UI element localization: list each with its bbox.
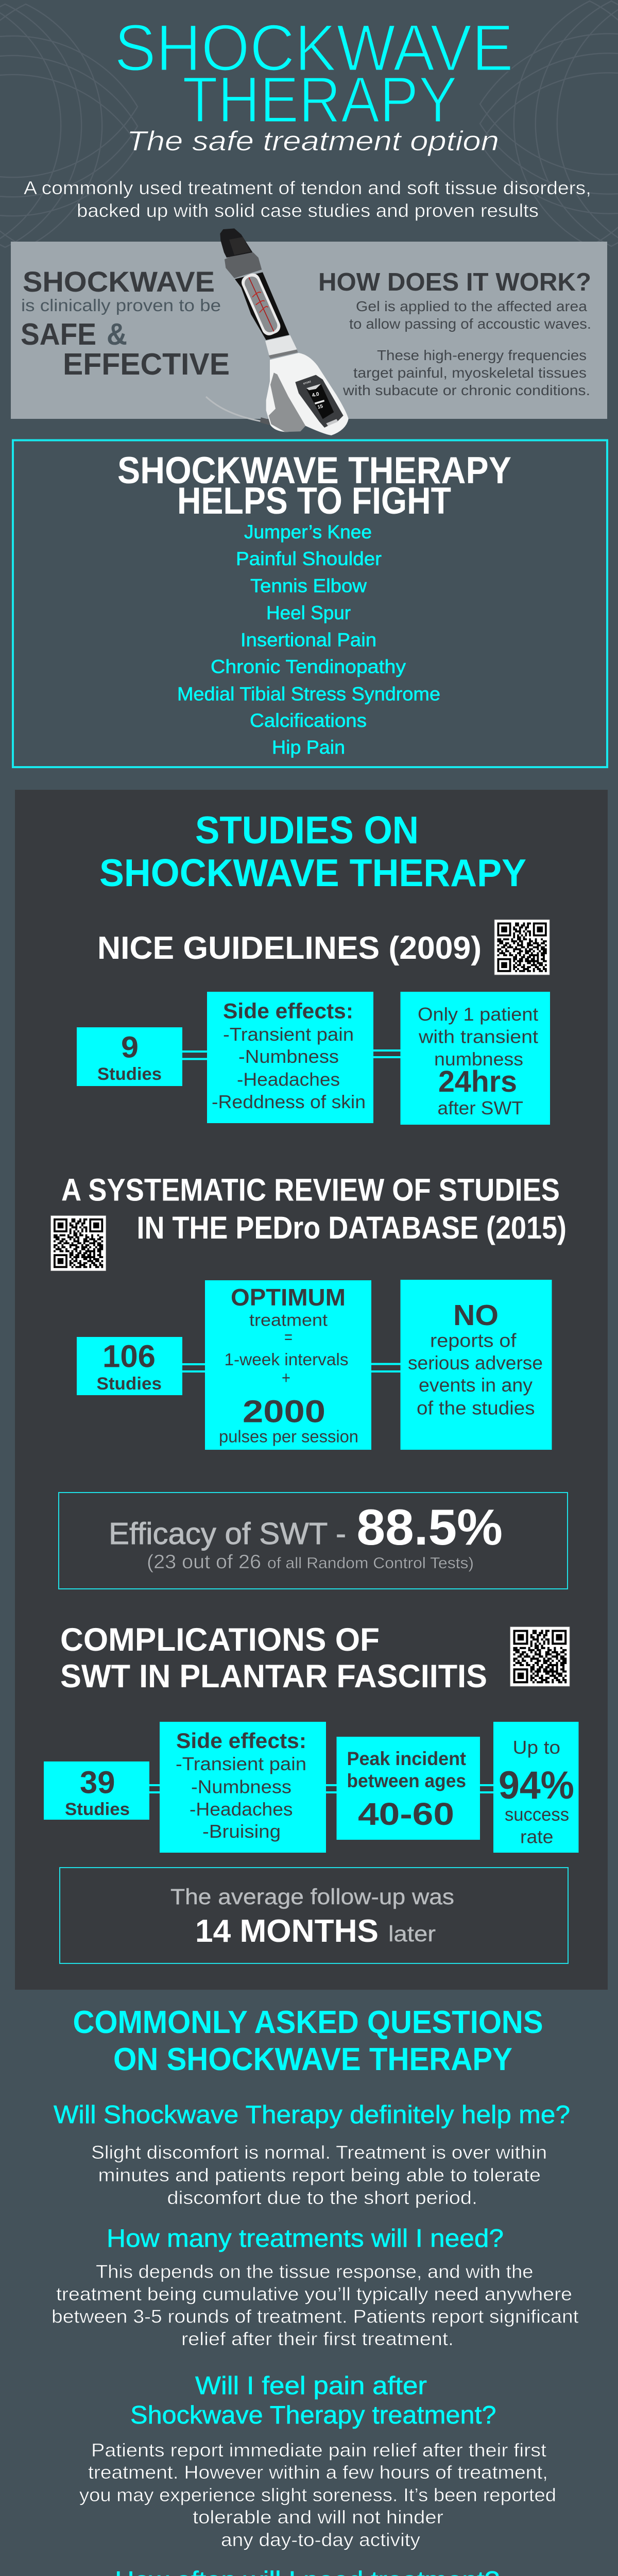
box: side effects: -Headaches [237,1069,340,1090]
question 3 [130,2372,496,2429]
box: one patient: Only 1 patient [418,1004,538,1025]
box: one patient: numbness [434,1048,523,1070]
answer 3: you may experience slight soreness. It’s been reported [79,2484,556,2505]
callout: follow-up: The average follow-up was [170,1885,454,1909]
flow: plantar fasciitis results [44,1722,579,1853]
box: no adverse events: of the studies [417,1397,535,1419]
box: side effects [160,1722,326,1853]
answer 3: tolerable and will not hinder [193,2506,443,2528]
title: SHOCKWAVE [114,11,513,85]
answer 1: discomfort due to the short period. [167,2187,477,2208]
box: one patient [401,992,550,1125]
icon: QR code PEDro [51,1216,106,1271]
answer 2 [52,2261,579,2349]
answer 1: minutes and patients report being able to tolerate [98,2164,541,2185]
title [114,11,513,136]
icon: shockwave device [206,228,349,435]
box: optimum treatment: = [284,1327,293,1347]
box: side effects: Side effects: [223,998,353,1023]
box: success rate: 94% [499,1764,574,1807]
heading: systematic review [61,1173,566,1245]
answer 2: relief after their first treatment. [181,2328,454,2349]
left claim text [21,265,230,381]
answer 3: any day-to-day activity [221,2529,420,2550]
box: peak incident: 40-60 [358,1797,454,1832]
conditions list: Insertional Pain [241,630,376,650]
subtitle: The safe treatment option [127,126,499,157]
FAQ heading: ON SHOCKWAVE THERAPY [113,2042,512,2077]
box: side effects [207,992,373,1123]
left claim text: & [107,317,127,351]
box: 39 studies [44,1761,149,1820]
box: optimum treatment: treatment [249,1311,328,1329]
intro text: A commonly used treatment of tendon and soft tissue disorders, [24,177,591,198]
answer 1 [91,2142,547,2208]
answer 3: Patients report immediate pain relief after their first [91,2439,546,2461]
left claim text: SAFE [21,317,96,351]
box: peak incident: Peak incident [347,1748,466,1769]
left claim text: EFFECTIVE [63,347,230,381]
title: THERAPY [182,63,457,136]
box: peak incident: between ages [347,1770,466,1791]
box: 9 studies: 9 [121,1030,139,1064]
callout: efficacy: 88.5% [356,1499,503,1555]
how does it work text: to allow passing of accoustic waves. [349,316,591,332]
box: side effects: -Headaches [190,1799,293,1820]
box: optimum treatment: 1-week intervals [225,1350,348,1369]
how does it work text: HOW DOES IT WORK? [318,268,591,296]
how does it work text: These high-energy frequencies [377,347,587,363]
studies heading [99,808,526,894]
box: side effects: -Reddness of skin [212,1091,366,1112]
icon: shockwave device: STORZ [303,380,312,385]
conditions list: Tennis Elbow [250,575,367,597]
box: 9 studies [77,1027,182,1086]
box: side effects: -Numbness [191,1776,291,1797]
box: success rate: rate [520,1826,553,1848]
conditions list: Calcifications [250,710,367,731]
box: side effects: -Transient pain [176,1753,306,1774]
conditions list: Hip Pain [272,737,345,758]
section: commonly asked questions [52,2005,579,2576]
FAQ heading: COMMONLY ASKED QUESTIONS [73,2005,543,2040]
answer 2: This depends on the tissue response, and with the [96,2261,534,2282]
conditions list: Chronic Tendinopathy [211,656,406,677]
answer 3 [79,2439,556,2550]
callout: follow-up: 14 MONTHS [195,1913,379,1949]
callout: follow-up: later [388,1922,436,1946]
heading: complications: COMPLICATIONS OF [60,1622,380,1658]
box: 39 studies: Studies [65,1800,130,1819]
box: no adverse events: events in any [419,1375,533,1396]
box: no adverse events: NO [453,1299,499,1332]
box: peak incident [337,1737,480,1840]
heading: systematic review: A SYSTEMATIC REVIEW OF STUDIES [61,1173,560,1208]
left claim text: is clinically proven to be [21,296,221,315]
box: optimum treatment: OPTIMUM [231,1284,346,1311]
box: 9 studies: Studies [97,1064,162,1084]
box: optimum treatment: 2000 [243,1394,325,1429]
conditions list: Jumper’s Knee [244,521,372,543]
box: side effects: -Numbness [238,1046,339,1067]
heading: complications [60,1622,487,1694]
box: 106 studies: 106 [102,1338,156,1374]
heading: HELPS TO FIGHT [177,480,451,522]
how does it work text [318,268,591,398]
left claim text: SHOCKWAVE [23,265,215,298]
answer 2: treatment being cumulative you’ll typically need anywhere [56,2283,572,2304]
box: success rate [493,1722,579,1853]
question 2: How many treatments will I need? [107,2225,504,2252]
heading [117,450,511,522]
heading: systematic review: IN THE PEDro DATABASE (2015) [137,1210,566,1245]
flow: NICE results [77,992,550,1125]
answer 2: between 3-5 rounds of treatment. Patients report significant [52,2306,579,2327]
box: no adverse events: reports of [430,1330,517,1351]
box: 39 studies: 39 [80,1765,115,1800]
box: optimum treatment [205,1280,371,1450]
conditions list: Heel Spur [266,602,351,623]
conditions list [177,521,440,758]
studies heading: SHOCKWAVE THERAPY [99,851,526,894]
studies heading: STUDIES ON [195,808,419,852]
box: one patient: with transient [418,1026,538,1047]
box: optimum treatment: pulses per session [219,1427,358,1446]
conditions list: Painful Shoulder [236,548,382,569]
icon: shockwave device: 4.0 [312,391,320,399]
callout: efficacy [59,1493,568,1589]
icon: QR code plantar fasciitis [510,1627,570,1686]
box: 106 studies [77,1337,182,1395]
question 1: Will Shockwave Therapy definitely help me? [54,2101,570,2129]
FAQ heading [73,2005,543,2077]
answer 1: Slight discomfort is normal. Treatment is over within [91,2142,547,2163]
box: no adverse events: serious adverse [408,1352,543,1374]
box: side effects: Side effects: [176,1728,306,1753]
box: success rate: Up to [513,1737,560,1758]
box: side effects: -Bruising [202,1821,281,1842]
box: no adverse events [401,1280,552,1450]
panel: how it works [11,228,607,435]
question 3: Will I feel pain after [195,2372,427,2400]
icon: QR code NICE [494,920,550,975]
box: success rate: success [505,1804,569,1825]
heading: SHOCKWAVE THERAPY [117,450,511,492]
heading: NICE guidelines: NICE GUIDELINES (2009) [97,930,482,966]
how does it work text: Gel is applied to the affected area [356,298,587,314]
box: optimum treatment: + [282,1368,290,1387]
callout: efficacy: of all Random Control Tests) [267,1554,474,1572]
box: one patient: 24hrs [438,1065,517,1098]
box: side effects: -Transient pain [223,1024,354,1045]
callout: efficacy: Efficacy of SWT - [109,1517,346,1551]
how does it work text: target painful, myoskeletal tissues [353,365,587,381]
intro text [24,177,591,221]
panel: conditions treated [13,440,607,767]
callout: efficacy: (23 out of 26 [147,1551,261,1573]
heading: complications: SWT IN PLANTAR FASCIITIS [60,1658,487,1694]
question 3: Shockwave Therapy treatment? [130,2401,496,2429]
panel: studies on shockwave therapy [15,790,608,1990]
box: 106 studies: Studies [97,1374,162,1394]
icon: shockwave device: 15 [317,403,323,410]
how does it work text: with subacute or chronic conditions. [342,382,590,398]
intro text: backed up with solid case studies and proven results [77,200,539,221]
conditions list: Medial Tibial Stress Syndrome [177,683,440,705]
flow: systematic review results [77,1280,552,1450]
callout: follow-up [60,1868,568,1963]
answer 3: treatment. However within a few hours of treatment, [88,2462,548,2483]
box: one patient: after SWT [438,1097,523,1118]
